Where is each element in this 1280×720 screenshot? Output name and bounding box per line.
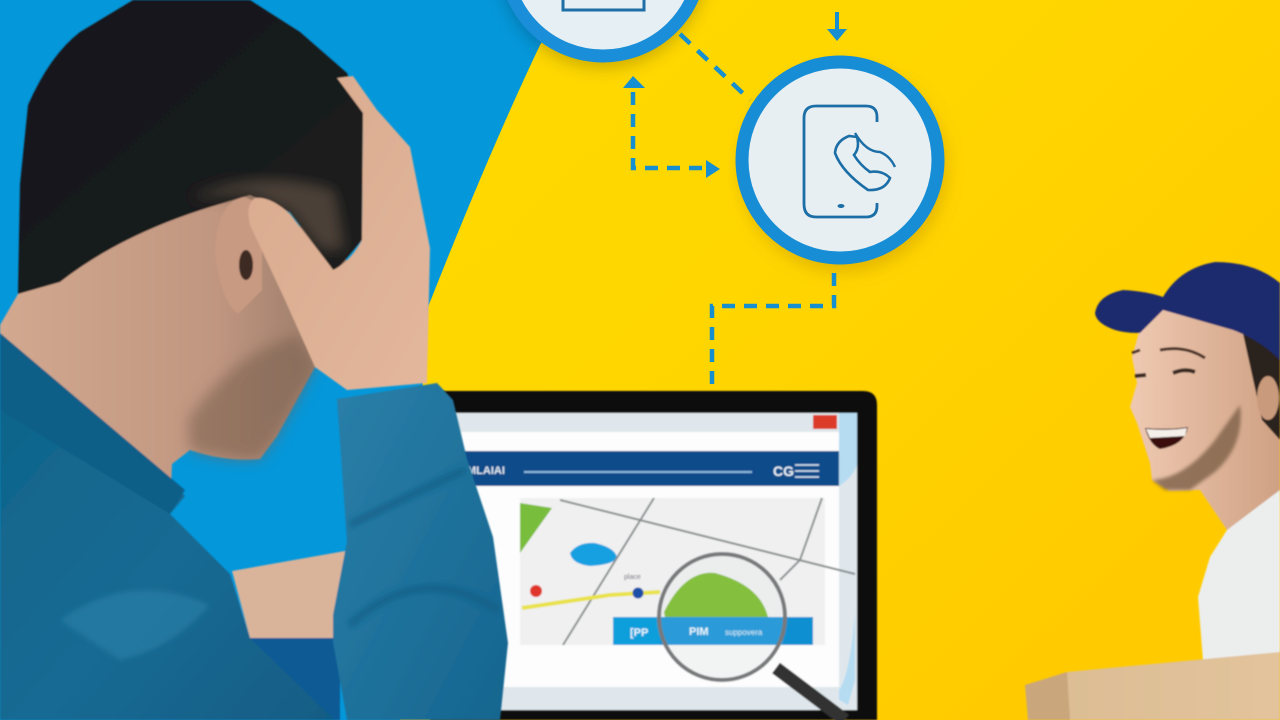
map: [520, 498, 855, 645]
courier teeth: [1146, 428, 1187, 438]
dark trousers: [250, 638, 340, 720]
arrow into phone circle: [827, 12, 847, 41]
magnifying glass: [659, 554, 845, 720]
icon: home dot: [838, 204, 844, 208]
icon: document: [563, 0, 644, 10]
icon: handset: [835, 136, 890, 190]
collar: [0, 333, 185, 514]
cap: [1095, 262, 1280, 360]
white page: [450, 432, 839, 687]
courier brows: [1132, 349, 1205, 358]
neck and jaw: [0, 190, 360, 514]
icon: phone outline: [804, 106, 877, 217]
magnified park: [664, 573, 768, 617]
courier shirt: [1198, 488, 1280, 660]
header icons: CG: [773, 463, 794, 479]
dashed double arrow: [623, 76, 720, 178]
courier: [1025, 262, 1280, 720]
lake: [570, 543, 617, 566]
magnified bar text: PIM: [689, 626, 709, 638]
sleeve: [333, 383, 508, 720]
courier mouth: [1145, 427, 1188, 449]
laptop with tracking page: [430, 391, 877, 720]
courier face and neck: [1130, 300, 1280, 530]
road label: place: [624, 574, 641, 581]
shirt fold: [60, 591, 210, 660]
sleeve fold: [350, 470, 498, 625]
hair: [18, 0, 363, 294]
blue background panel: [0, 0, 570, 720]
courier eyes: [1135, 370, 1195, 376]
icon: handset swoosh: [855, 133, 895, 167]
red location pin: [530, 585, 542, 597]
courier ear: [1257, 376, 1279, 420]
box flap: [1025, 672, 1070, 720]
laptop frame: [430, 391, 877, 720]
dashed connector to laptop: [712, 273, 834, 388]
green park: [520, 503, 552, 553]
forearm: [232, 551, 345, 642]
beard shading: [188, 335, 315, 460]
lens rim: [659, 554, 785, 680]
hair fade: [190, 179, 345, 250]
red window control: [813, 415, 837, 429]
screen right accent: [839, 413, 857, 705]
ear shadow: [239, 250, 253, 280]
phone support circle: [739, 62, 947, 272]
magnified bar: [660, 617, 783, 645]
hand on head: [248, 76, 430, 390]
roads: [560, 498, 855, 645]
call to action bar: [613, 617, 813, 645]
blue location pin: [632, 588, 644, 598]
screen background: [450, 413, 857, 710]
bar text: [PP: [630, 627, 648, 639]
top icon circle: [499, 0, 707, 68]
dashed connector between circles: [680, 34, 750, 100]
courier beard: [1152, 405, 1241, 490]
page header bar: [450, 451, 839, 486]
stressed man: [0, 0, 508, 720]
shirt body: [0, 333, 335, 720]
courier hair: [1225, 325, 1280, 470]
ear: [215, 197, 262, 314]
magnified bar caption: suppovera: [725, 628, 763, 637]
header title: MLAIAI: [467, 465, 505, 477]
cardboard box: [1025, 652, 1280, 720]
route line: [522, 592, 660, 608]
